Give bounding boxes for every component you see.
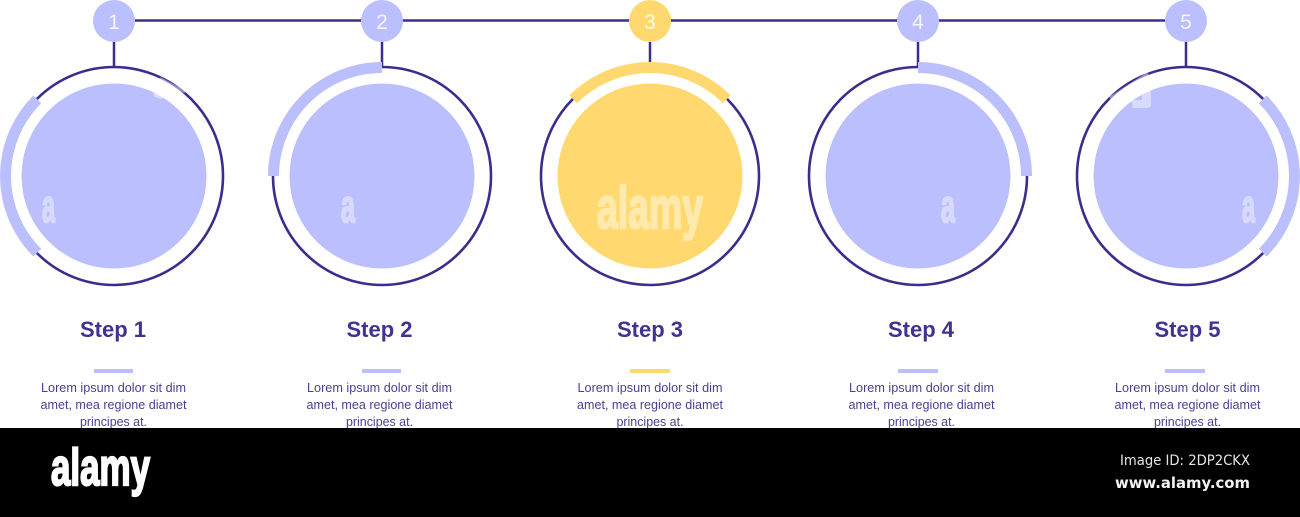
step 5 description: principes at.	[1154, 415, 1221, 429]
step 1 inner disc	[22, 84, 206, 268]
footer band	[0, 428, 1300, 517]
step 4 description: principes at.	[888, 415, 955, 429]
step 3 description: Lorem ipsum dolor sit dim	[578, 381, 722, 395]
step 1 number badge: 1	[108, 11, 120, 34]
step 1 accent bar	[94, 369, 133, 373]
panel: step 3	[541, 0, 759, 429]
step 2 highlighted arc	[274, 68, 382, 176]
step 1 description: Lorem ipsum dolor sit dim	[41, 381, 186, 395]
watermark overlays: a	[341, 180, 355, 232]
step 4 highlighted arc	[918, 68, 1026, 176]
step 1 description	[40, 381, 187, 429]
timeline connector	[114, 20, 1186, 67]
step 5 number badge	[1165, 0, 1207, 42]
step 5 number badge: 5	[1180, 11, 1192, 34]
step 3 description	[577, 381, 724, 429]
step 5 accent bar	[1165, 369, 1205, 373]
panel: step 4	[809, 0, 1027, 429]
step 4 description: Lorem ipsum dolor sit dim	[849, 381, 994, 395]
step 3 number badge: 3	[644, 11, 656, 34]
step 1 description: amet, mea regione diamet	[40, 398, 187, 412]
step 2 outer ring	[273, 67, 491, 285]
step 4 description	[848, 381, 995, 429]
step 5 outer ring	[1077, 67, 1295, 285]
step 2 description: amet, mea regione diamet	[306, 398, 453, 412]
step 1 outer ring	[5, 67, 223, 285]
step 1 number badge	[93, 0, 135, 42]
step 2 description	[306, 381, 453, 429]
step 4 heading: Step 4	[888, 317, 955, 342]
step 1 highlighted arc	[6, 99, 37, 253]
watermark overlays: a	[941, 180, 955, 232]
step 5 highlighted arc	[1263, 99, 1294, 253]
step 4 number badge: 4	[912, 11, 924, 34]
step 3 description: principes at.	[616, 415, 684, 429]
step 3 description: amet, mea regione diamet	[577, 398, 724, 412]
panel: step 1	[5, 0, 223, 429]
step 2 number badge	[361, 0, 403, 42]
step 2 description: principes at.	[346, 415, 413, 429]
website: www.alamy.com	[1115, 474, 1250, 492]
step 5 description: Lorem ipsum dolor sit dim	[1115, 381, 1260, 395]
step 5 inner disc	[1094, 84, 1278, 268]
step 1 heading: Step 1	[80, 317, 146, 342]
image id: Image ID: 2DP2CKX	[1120, 453, 1250, 469]
panel: step 2	[273, 0, 491, 429]
step 2 heading: Step 2	[346, 317, 412, 342]
watermark overlays: alamy	[597, 176, 703, 241]
step 2 description: Lorem ipsum dolor sit dim	[307, 381, 452, 395]
step 2 number badge: 2	[376, 11, 388, 34]
step 5 description: amet, mea regione diamet	[1114, 398, 1261, 412]
step 2 inner disc	[290, 84, 474, 268]
footer logo: alamy	[51, 439, 150, 497]
step 1 description: principes at.	[80, 415, 147, 429]
step 4 inner disc	[826, 84, 1010, 268]
step 3 highlighted arc	[573, 68, 727, 99]
step 5 description	[1114, 381, 1261, 429]
watermark overlays: a	[1242, 180, 1255, 232]
step 3 accent bar	[630, 369, 670, 373]
step 3 heading: Step 3	[617, 317, 683, 342]
step 4 description: amet, mea regione diamet	[848, 398, 995, 412]
panel: step 5	[1077, 0, 1295, 429]
step 3 number badge	[629, 0, 671, 42]
watermark overlays: a	[42, 180, 55, 232]
step 3 outer ring	[541, 67, 759, 285]
step 4 outer ring	[809, 67, 1027, 285]
step 5 heading: Step 5	[1154, 317, 1220, 342]
step 4 number badge	[897, 0, 939, 42]
step 4 accent bar	[898, 369, 938, 373]
watermark overlays	[42, 74, 1255, 241]
step 3 inner disc	[558, 84, 742, 268]
step 2 accent bar	[362, 369, 401, 373]
